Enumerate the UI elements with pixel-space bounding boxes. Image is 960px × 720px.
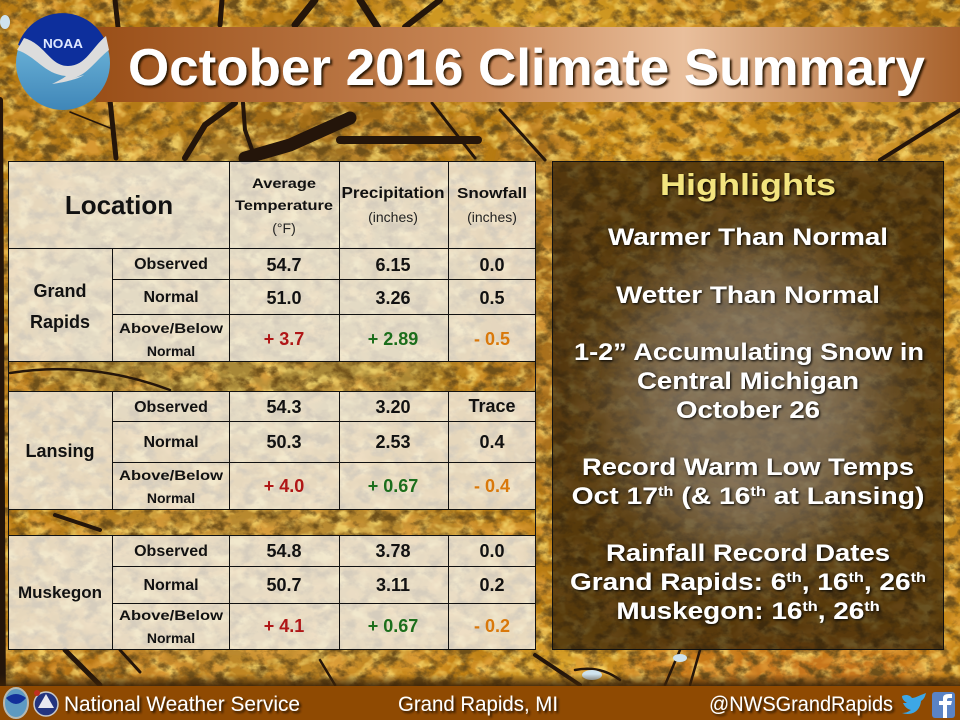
rows: Muskegon	[18, 541, 510, 646]
rows: Grand Rapids: 3.26	[375, 288, 411, 308]
table header: Average	[252, 175, 316, 191]
highlights text: th	[848, 570, 864, 586]
rows: Lansing: 3.20	[375, 397, 411, 417]
table header: Snowfall	[457, 185, 527, 202]
highlights text: th	[864, 599, 880, 615]
highlights text	[570, 224, 926, 625]
table header: (inches)	[467, 209, 517, 225]
rows: Grand Rapids: 0.0	[479, 255, 505, 275]
rows: Lansing: Lansing	[25, 441, 95, 461]
rows: Muskegon: 3.78	[375, 541, 411, 561]
rows: Muskegon: 50.7	[266, 575, 302, 595]
rows: Grand Rapids: Rapids	[30, 312, 90, 332]
table header: (inches)	[368, 209, 418, 225]
rows: Muskegon: Normal	[147, 630, 195, 646]
highlights text: , 16	[802, 568, 848, 596]
rows: Lansing: 0.4	[479, 432, 505, 452]
table header: Precipitation	[342, 185, 444, 202]
rows: Lansing: + 4.0	[264, 476, 304, 496]
footer: handle: @NWSGrandRapids	[709, 693, 893, 716]
rows: Lansing: 50.3	[266, 432, 302, 452]
rows: Lansing: - 0.4	[474, 476, 510, 496]
footer: Grand Rapids, MI: Grand Rapids, MI	[398, 693, 558, 716]
icon: NOAA logo: NOAA	[43, 36, 84, 51]
highlights text: at Lansing)	[766, 482, 924, 509]
rows: Lansing: Normal	[147, 490, 195, 506]
rows: Grand Rapids: 51.0	[266, 288, 302, 308]
panel: climate data table	[8, 161, 536, 650]
rows: Grand Rapids: + 2.89	[368, 329, 418, 349]
highlights text: Record Warm Low Temps	[582, 454, 914, 481]
rows: Muskegon: 0.2	[479, 575, 505, 595]
rows: Muskegon: 54.8	[266, 541, 302, 561]
rows: Grand Rapids: Above/Below	[119, 320, 223, 336]
rows: Grand Rapids: 0.5	[479, 288, 505, 308]
rows: Grand Rapids: Normal	[147, 343, 195, 359]
rows: Grand Rapids: + 3.7	[264, 329, 304, 349]
rows: Lansing: Observed	[134, 399, 208, 416]
rows: Muskegon: + 0.67	[368, 616, 418, 636]
rows: Muskegon: + 4.1	[264, 616, 304, 636]
highlights text: th	[802, 599, 818, 615]
highlights text: Grand Rapids: 6	[570, 568, 786, 596]
rows: Muskegon: Muskegon	[18, 583, 102, 602]
rows: Grand Rapids: Observed	[134, 256, 208, 273]
highlights text: th	[658, 484, 673, 500]
highlights text: , 26	[818, 597, 864, 625]
rows: Lansing: + 0.67	[368, 476, 418, 496]
highlights text: October 26	[676, 397, 820, 424]
rows: Muskegon: 0.0	[479, 541, 505, 561]
highlights text: th	[786, 570, 802, 586]
heading: highlights: Highlights	[660, 167, 836, 202]
rows: Grand Rapids: 54.7	[266, 255, 302, 275]
rows: Grand Rapids	[30, 255, 510, 359]
rows: Grand Rapids: 6.15	[375, 255, 411, 275]
highlights text: 1-2” Accumulating Snow in	[574, 339, 924, 366]
rows: Lansing: Normal	[143, 434, 199, 451]
highlights text: (& 16	[673, 482, 750, 509]
highlights text: th	[911, 570, 926, 586]
rows: Muskegon: Normal	[143, 577, 199, 594]
icon: NOAA logo	[16, 13, 110, 110]
title: October 2016 Climate Summary	[128, 39, 925, 97]
icon: twitter	[902, 693, 926, 714]
highlights text: , 26	[864, 568, 911, 596]
highlights text: Wetter Than Normal	[616, 282, 880, 309]
rows: Grand Rapids: - 0.5	[474, 329, 510, 349]
rows: Muskegon: 3.11	[376, 575, 410, 595]
highlights text: th	[750, 484, 766, 500]
table header	[65, 175, 527, 236]
rows: Lansing: Above/Below	[119, 467, 223, 483]
rows: Lansing: 54.3	[266, 397, 302, 417]
table grid	[8, 161, 536, 650]
rows: Lansing: Trace	[468, 396, 516, 416]
icon: facebook	[932, 692, 955, 718]
rows: Muskegon: Observed	[134, 543, 208, 560]
footer bar	[0, 674, 960, 720]
highlights text: Muskegon: 16	[616, 597, 802, 625]
rows: Lansing: 2.53	[375, 432, 411, 452]
highlights text: Central Michigan	[637, 368, 859, 395]
footer: National Weather Service: National Weather Service	[64, 693, 300, 716]
title band	[96, 27, 960, 102]
table header: (°F)	[272, 220, 296, 236]
rows: Muskegon: - 0.2	[474, 616, 510, 636]
icon: NOAA small	[4, 688, 28, 718]
highlights text: Oct 17	[572, 482, 658, 509]
highlights text: Rainfall Record Dates	[606, 540, 890, 567]
table cell fills	[8, 161, 536, 649]
panel: highlights	[552, 162, 944, 650]
rows: Lansing	[25, 396, 516, 506]
icon: NWS small	[34, 690, 58, 716]
highlights text: Warmer Than Normal	[608, 224, 888, 251]
rows: Muskegon: Above/Below	[119, 607, 223, 623]
table header: Temperature	[235, 197, 333, 213]
rows: Grand Rapids: Grand	[33, 281, 87, 301]
rows: Grand Rapids: Normal	[143, 289, 199, 306]
table header: Location	[65, 190, 173, 220]
